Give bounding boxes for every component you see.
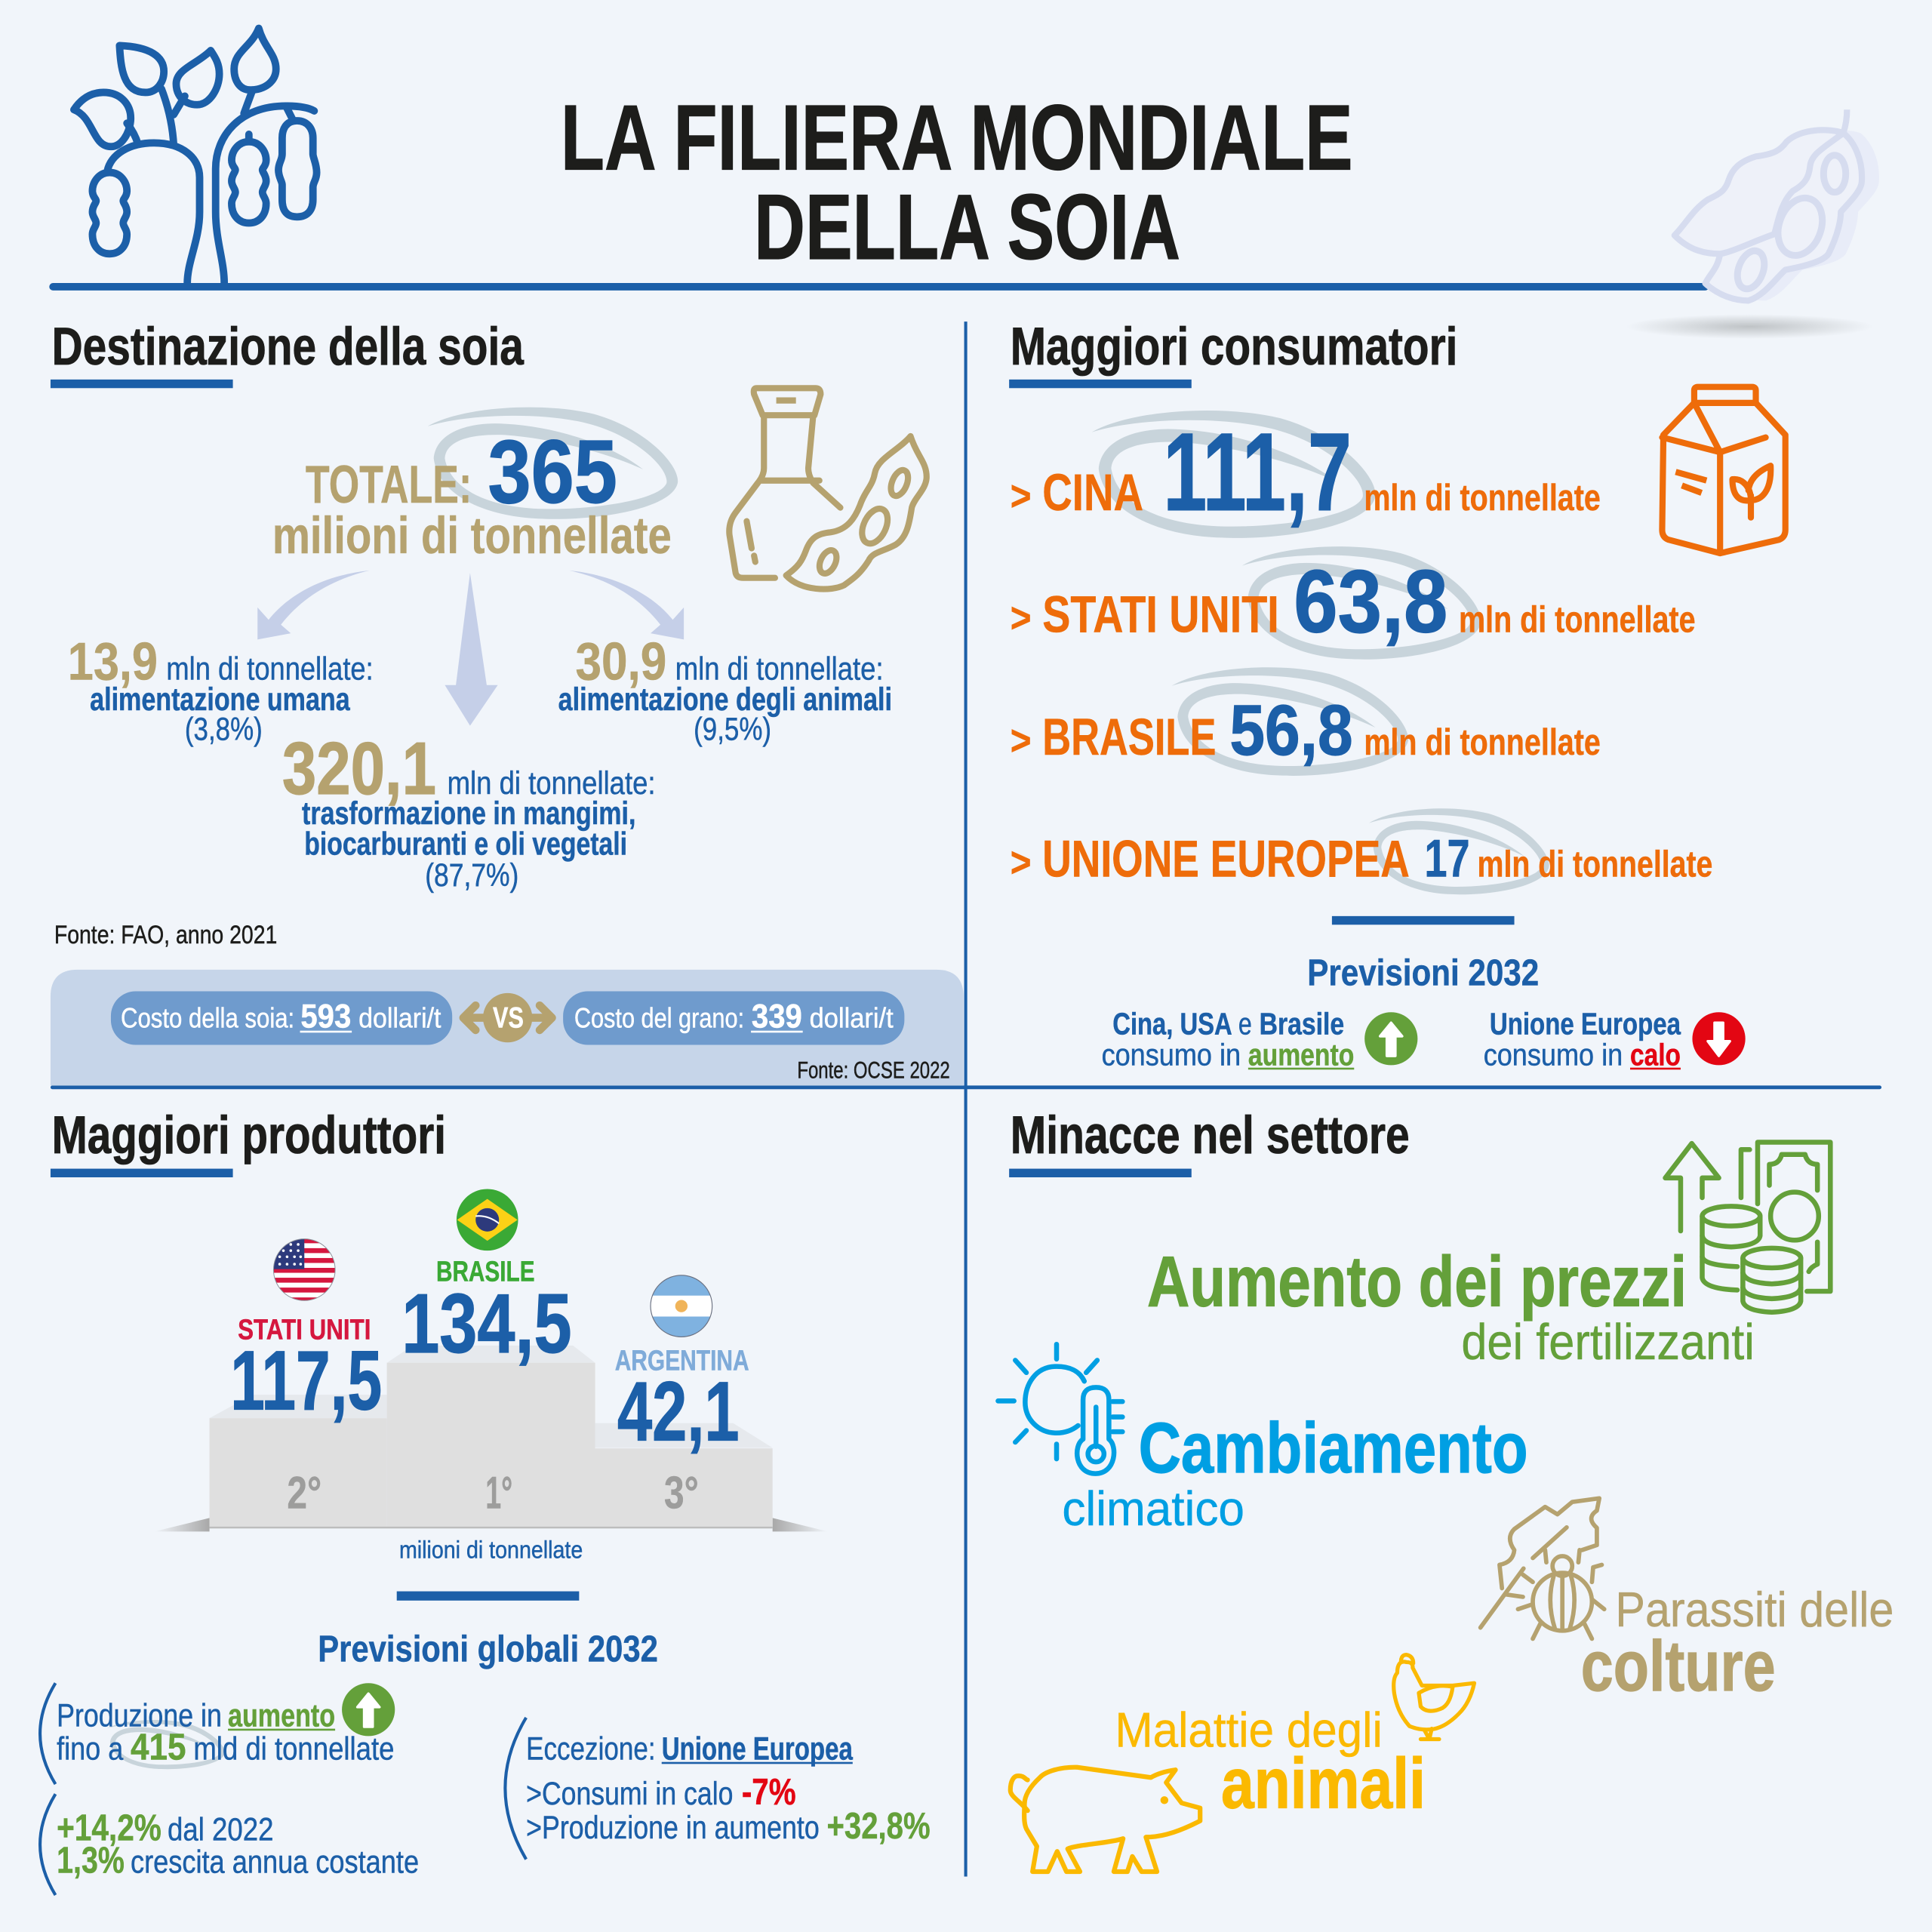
header rule xyxy=(49,283,1709,291)
heading: Maggiori produttori xyxy=(52,1105,446,1164)
icon: oil bottle and pod xyxy=(729,388,927,589)
flag: usa xyxy=(273,1238,335,1303)
block: eccezione: Unione Europea xyxy=(662,1730,853,1766)
forecast: calo: calo xyxy=(1630,1038,1681,1072)
pill: grano: 339 xyxy=(752,998,802,1035)
forecast: aumento: aumento xyxy=(1248,1038,1354,1072)
icon: up arrow xyxy=(342,1683,395,1736)
rule xyxy=(1332,916,1515,924)
heading xyxy=(51,1105,446,1177)
item: alimentazione umana: alimentazione umana xyxy=(90,681,350,717)
row: unione europea: > xyxy=(1011,839,1032,886)
forecast: aumento: consumo in xyxy=(1102,1038,1241,1072)
heading: Destinazione della soia xyxy=(52,316,525,376)
subheading: previsioni globali: Previsioni globali 2032 xyxy=(318,1629,658,1670)
block: produzione: 415 xyxy=(131,1727,186,1767)
block: produzione: Produzione in xyxy=(57,1697,222,1733)
row: stati uniti: mln di tonnellate xyxy=(1459,600,1696,641)
label: argentina: 42,1 xyxy=(617,1364,740,1459)
row: cina xyxy=(1011,411,1601,538)
pill: soia: 593 xyxy=(300,998,351,1035)
forecast: calo: Unione Europea xyxy=(1490,1007,1681,1041)
scribble around total xyxy=(428,408,678,519)
label: stati uniti xyxy=(230,1314,382,1428)
threat: parassiti delle colture: Parassiti delle xyxy=(1615,1582,1894,1637)
label: brasile: 134,5 xyxy=(401,1276,572,1371)
title: LA FILIERA MONDIALE xyxy=(561,85,1353,189)
title xyxy=(561,85,1353,278)
forecast: calo: consumo in xyxy=(1484,1038,1623,1072)
item: trasformazione: (87,7%) xyxy=(425,857,518,893)
chart: podium xyxy=(154,1346,828,1531)
item: trasformazione: trasformazione in mangimi, xyxy=(302,795,635,831)
label: stati uniti: 117,5 xyxy=(230,1334,382,1428)
row: unione europea: UNIONE EUROPEA xyxy=(1042,830,1410,888)
icon: soy plant xyxy=(74,29,317,284)
pill: soia xyxy=(111,991,452,1044)
block: crescita: dal 2022 xyxy=(168,1811,273,1847)
bracket xyxy=(40,1683,55,1784)
forecast: aumento xyxy=(1102,1007,1354,1072)
block: produzione: aumento xyxy=(228,1697,335,1733)
row: unione europea xyxy=(1011,808,1712,894)
icon: down arrow xyxy=(1692,1012,1746,1065)
bracket xyxy=(505,1718,526,1860)
total: milioni di tonnellate xyxy=(272,506,672,565)
pill: grano xyxy=(563,991,904,1044)
row: stati uniti: STATI UNITI xyxy=(1042,586,1279,644)
badge: vs with arrows: VS xyxy=(493,1002,524,1035)
panel: minacce nel settore xyxy=(998,1105,1894,1872)
threat: aumento dei prezzi: dei fertilizzanti xyxy=(1461,1314,1755,1371)
row: brasile: mln di tonnellate xyxy=(1364,722,1601,763)
total xyxy=(272,422,672,565)
row: stati uniti xyxy=(1011,546,1696,660)
heading: Minacce nel settore xyxy=(1011,1105,1410,1164)
title: DELLA SOIA xyxy=(754,175,1180,278)
label: stati uniti: STATI UNITI xyxy=(238,1314,371,1346)
row: stati uniti: > xyxy=(1011,595,1032,641)
row: unione europea: mln di tonnellate xyxy=(1478,844,1712,885)
header xyxy=(49,29,1879,339)
chart: podium: 3° xyxy=(664,1466,699,1518)
icon: up arrow xyxy=(1364,1012,1417,1065)
source: Fonte: FAO, anno 2021 xyxy=(54,921,277,949)
icon: pig xyxy=(1011,1767,1200,1872)
flag: brazil xyxy=(457,1189,518,1251)
panel: destinazione della soia xyxy=(51,316,964,1085)
label: argentina: ARGENTINA xyxy=(615,1345,749,1377)
chart: podium: 2° xyxy=(287,1466,321,1518)
threat: malattie degli animali: Malattie degli xyxy=(1115,1703,1383,1758)
forecast: calo xyxy=(1484,1007,1681,1072)
threat: parassiti delle colture: colture xyxy=(1581,1626,1776,1706)
item: alimentazione umana: mln di tonnellate: xyxy=(166,651,374,686)
icon: faint soybean pod xyxy=(1675,109,1879,300)
threat: cambiamento climatico: Cambiamento xyxy=(1139,1408,1527,1488)
item: alimentazione umana xyxy=(68,631,374,747)
forecast: aumento: Brasile xyxy=(1260,1007,1344,1041)
panel: maggiori consumatori xyxy=(1009,316,1786,1072)
block: crescita: +14,2% xyxy=(57,1807,162,1848)
panel: maggiori produttori xyxy=(40,1105,931,1895)
item: trasformazione xyxy=(282,727,656,893)
label: brasile: BRASILE xyxy=(436,1255,535,1287)
block: eccezione: >Consumi in calo xyxy=(526,1776,733,1811)
forecast: aumento: e xyxy=(1238,1007,1252,1041)
icon: leaf and beetle xyxy=(1481,1498,1604,1638)
block: produzione: mld di tonnellate xyxy=(193,1730,394,1766)
item: alimentazione umana: 13,9 xyxy=(68,631,158,691)
block: produzione: fino a xyxy=(57,1730,124,1766)
row: unione europea: 17 xyxy=(1424,829,1470,888)
bracket xyxy=(40,1794,55,1895)
flag: argentina xyxy=(651,1275,712,1337)
label: brasile xyxy=(401,1255,572,1371)
threat: cambiamento climatico: climatico xyxy=(1062,1482,1244,1536)
threat: cambiamento climatico xyxy=(1062,1408,1527,1536)
rule xyxy=(397,1592,579,1601)
block: eccezione: Eccezione: xyxy=(526,1730,656,1766)
heading xyxy=(51,316,525,388)
total: TOTALE: xyxy=(306,454,472,514)
threat: malattie degli animali: animali xyxy=(1221,1744,1426,1824)
row: cina: CINA xyxy=(1042,463,1143,521)
total: 365 xyxy=(488,422,617,522)
pill: soia: Costo della soia: xyxy=(121,1003,294,1034)
threat: aumento dei prezzi xyxy=(1147,1242,1755,1371)
block: crescita xyxy=(57,1807,419,1881)
block: eccezione: >Produzione in aumento xyxy=(526,1810,820,1845)
threat: malattie degli animali xyxy=(1115,1703,1426,1824)
block: crescita: crescita annua costante xyxy=(131,1844,419,1880)
pod shadow xyxy=(1626,314,1873,339)
row: cina: > xyxy=(1011,472,1032,519)
pill: soia: dollari/t xyxy=(358,1003,441,1034)
row: brasile xyxy=(1011,667,1601,776)
item: trasformazione: mln di tonnellate: xyxy=(448,765,656,801)
block: crescita: 1,3% xyxy=(57,1841,125,1881)
badge: vs with arrows xyxy=(463,993,552,1042)
item: trasformazione: 320,1 xyxy=(282,727,436,810)
row: cina: mln di tonnellate xyxy=(1364,478,1601,518)
item: trasformazione: biocarburanti e oli vegetali xyxy=(304,826,627,862)
item: alimentazione degli animali xyxy=(558,631,892,747)
subheading: previsioni 2032: Previsioni 2032 xyxy=(1307,952,1539,993)
block: produzione xyxy=(57,1697,394,1769)
item: alimentazione degli animali: alimentazione degli animali xyxy=(558,681,892,717)
item: alimentazione degli animali: (9,5%) xyxy=(694,712,771,747)
item: alimentazione degli animali: mln di tonnellate: xyxy=(675,651,884,686)
row: brasile: > xyxy=(1011,717,1032,764)
source: Fonte: OCSE 2022 xyxy=(797,1057,950,1084)
chart: podium: 1° xyxy=(485,1466,512,1518)
arrows xyxy=(257,571,684,726)
icon: chicken xyxy=(1394,1655,1474,1739)
pill: grano: Costo del grano: xyxy=(574,1003,744,1034)
row: brasile: BRASILE xyxy=(1042,708,1216,766)
chart unit: milioni di tonnellate xyxy=(399,1535,583,1563)
icon: sun and thermometer xyxy=(998,1344,1122,1474)
forecast: aumento: Cina, USA xyxy=(1112,1007,1232,1041)
icon: money and coins xyxy=(1666,1142,1830,1312)
threat: aumento dei prezzi: Aumento dei prezzi xyxy=(1147,1242,1687,1322)
panel: cost comparison xyxy=(51,970,964,1085)
icon: milk carton xyxy=(1662,387,1786,553)
row: cina: 111,7 xyxy=(1163,411,1352,534)
heading xyxy=(1009,316,1457,388)
row: brasile: 56,8 xyxy=(1229,691,1353,771)
block: eccezione xyxy=(526,1730,931,1847)
pill: grano: dollari/t xyxy=(810,1003,894,1034)
heading: Maggiori consumatori xyxy=(1011,316,1457,376)
row: stati uniti: 63,8 xyxy=(1294,552,1447,651)
item: alimentazione umana: (3,8%) xyxy=(185,712,263,747)
heading xyxy=(1009,1105,1410,1177)
item: alimentazione degli animali: 30,9 xyxy=(575,631,666,691)
label: argentina xyxy=(615,1345,749,1459)
threat: parassiti delle colture xyxy=(1581,1582,1894,1706)
dividers xyxy=(51,321,1881,1877)
block: eccezione: -7% xyxy=(742,1772,796,1813)
block: eccezione: +32,8% xyxy=(827,1806,931,1847)
